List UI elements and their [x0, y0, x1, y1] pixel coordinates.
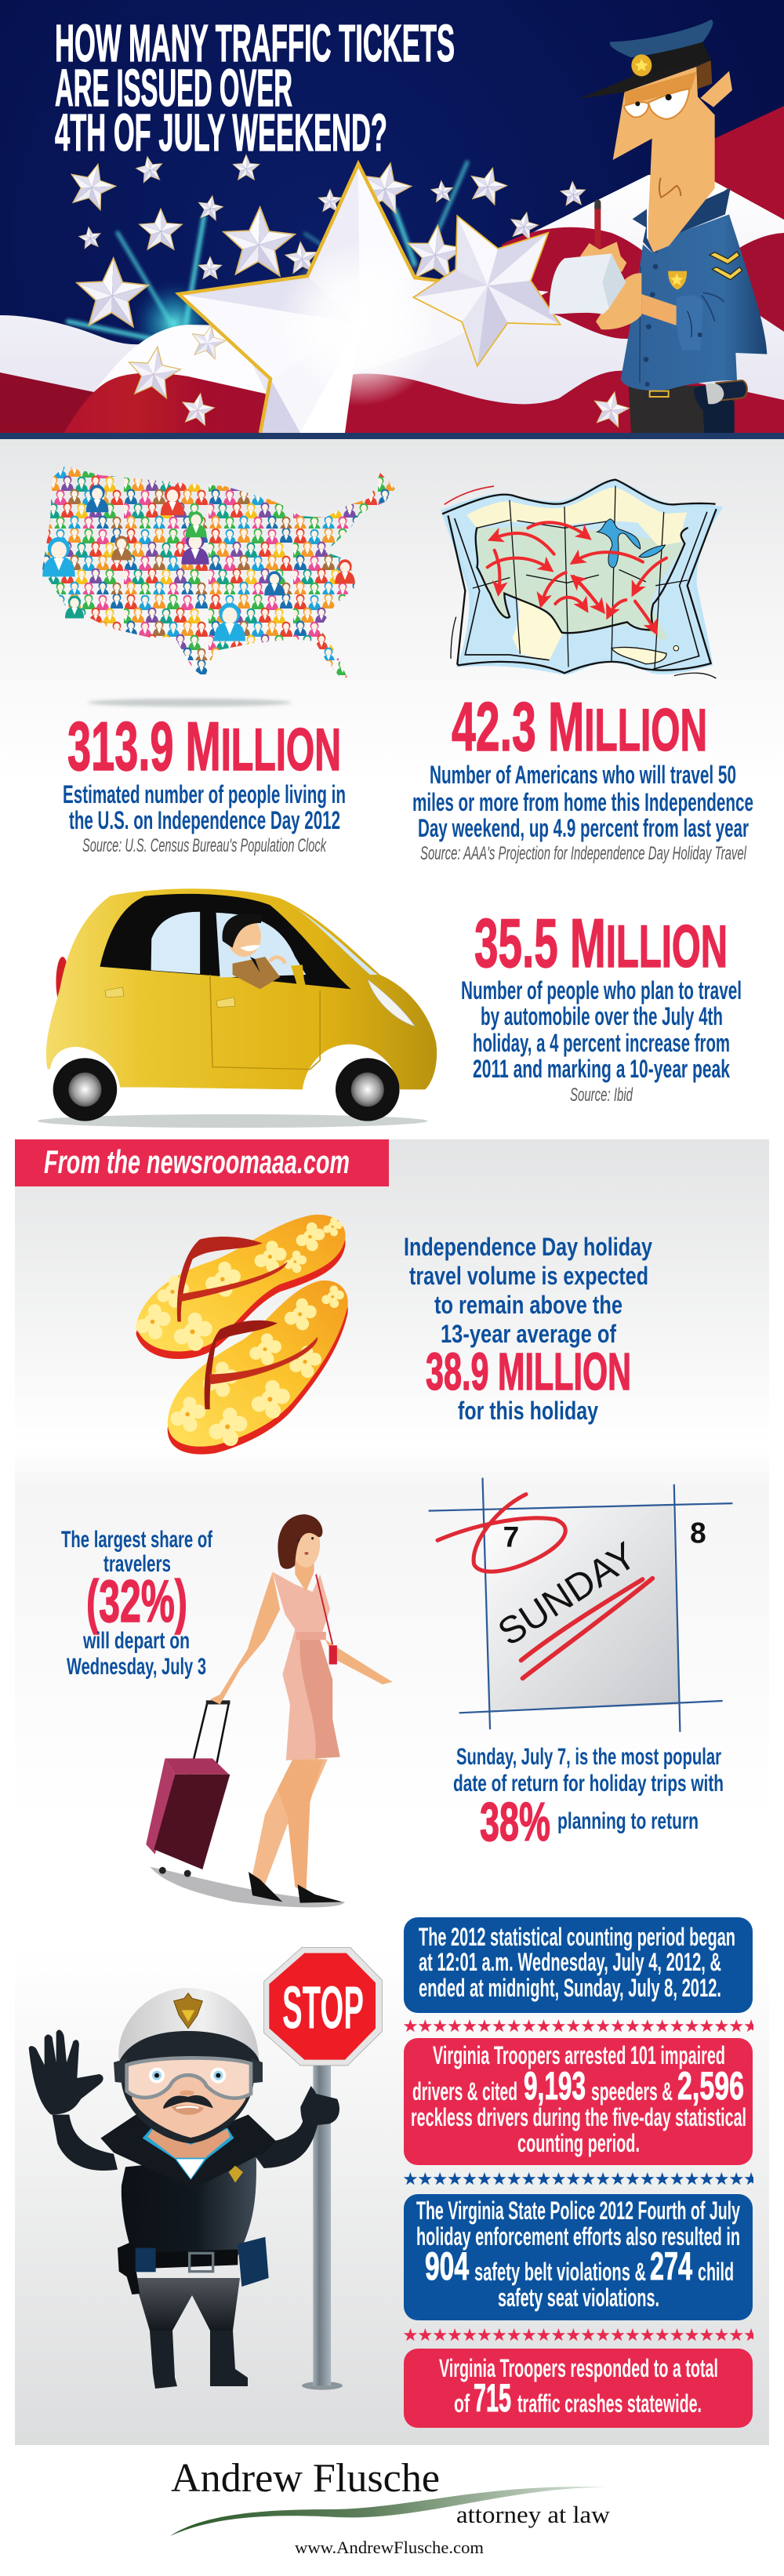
page background: upper section: [0, 439, 784, 784]
flip flop: front: [168, 1281, 348, 1455]
officer: lower body: [550, 188, 767, 433]
illustration: USA map made of people: [42, 466, 395, 678]
car wheels: [53, 1058, 400, 1121]
illustration: road map with arrows: [443, 480, 720, 678]
flip flop: back: [136, 1215, 345, 1359]
header title: 4TH OF JULY WEEKEND?: [55, 104, 387, 162]
star divider: red: [403, 2018, 753, 2033]
big gold star: [179, 164, 549, 433]
footer logo: Andrew Flusche: Andrew Flusche: [171, 2456, 440, 2501]
box: arrests and citations: speeders &: [591, 2077, 673, 2105]
text: largest share of travelers: will depart on: [82, 1628, 190, 1654]
panel: newsroom facts: [15, 1139, 769, 2445]
second gold star: [415, 217, 559, 365]
text: Sunday return: [453, 1744, 724, 1852]
text: largest share of travelers: (32%): [86, 1568, 187, 1635]
police officer: [550, 20, 767, 433]
stop sign and pole: STOP: [282, 1975, 364, 2042]
text: travel volume: to remain above the: [434, 1291, 622, 1319]
officer head and helmet: [114, 1988, 263, 2143]
flag: white waves: [0, 175, 784, 433]
flag: lower red right: [300, 371, 784, 433]
flag: upper red wave: [502, 227, 651, 339]
header title: ARE ISSUED OVER: [55, 59, 292, 118]
text: travel volume: travel volume is expected: [409, 1262, 648, 1290]
source: Source: Ibid: [570, 1085, 633, 1106]
box: arrests and citations: 2,596: [677, 2064, 744, 2108]
text: largest share of travelers: travelers: [103, 1551, 171, 1577]
small stars: [64, 154, 632, 429]
box: enforcement efforts: safety seat violations.: [498, 2284, 659, 2312]
stat description: [63, 780, 346, 834]
illustration: calendar marked Sunday: 8: [690, 1517, 706, 1549]
text: largest share of travelers: [61, 1527, 213, 1680]
box: arrests and citations: counting period.: [517, 2129, 640, 2157]
stat: 313.9 million: 313.9 MILLION: [67, 707, 341, 785]
stat description: [412, 761, 753, 842]
fireworks rays: [68, 162, 467, 369]
banner: from the newsroom: [15, 1139, 389, 1186]
stat: 35.5 million: [461, 904, 742, 1106]
stat: 42.3 million: [412, 688, 753, 864]
box: counting period: [404, 1917, 753, 2013]
box: enforcement efforts: 274: [650, 2244, 692, 2288]
illustration: flip flops: [136, 1215, 348, 1455]
stop sign and pole: [264, 1947, 382, 2390]
flag: right red stripe: [725, 233, 784, 332]
map shadow: [88, 699, 292, 707]
box: enforcement efforts: child: [698, 2258, 734, 2286]
text: largest share of travelers: The largest share of: [61, 1527, 213, 1553]
source: Source: U.S. Census Bureau's Population Clock: [82, 835, 327, 856]
header bottom band: [0, 433, 784, 439]
box: traffic crashes: of: [454, 2389, 470, 2418]
stat: 42.3 million: 42.3 MILLION: [452, 688, 707, 765]
stat description: the U.S. on Independence Day 2012: [69, 806, 340, 834]
text: travel volume: 13-year average of: [441, 1320, 616, 1348]
text: travel volume: [404, 1233, 652, 1425]
illustration: woman with suitcase: [146, 1514, 393, 1907]
box: arrests and citations: drivers & cited: [412, 2077, 517, 2105]
footer logo: Andrew Flusche: www.AndrewFlusche.com: [295, 2538, 484, 2557]
text: travel volume: 38.9 MILLION: [426, 1342, 631, 1401]
box: arrests and citations: 9,193: [524, 2064, 586, 2108]
text: Sunday return: 38%: [480, 1791, 550, 1852]
header title: [55, 14, 455, 162]
illustration: motorcycle officer with stop sign: [29, 1947, 382, 2390]
box: traffic crashes: [404, 2349, 753, 2428]
star divider: red: [403, 2327, 753, 2342]
car driver: [223, 914, 307, 994]
box: enforcement efforts: [404, 2194, 753, 2320]
flag: lower red left: [64, 373, 300, 433]
illustration: calendar marked Sunday: [429, 1478, 732, 1732]
text: largest share of travelers: Wednesday, July 3: [67, 1654, 206, 1680]
footer logo: Andrew Flusche: [170, 2456, 612, 2557]
flag: left red stripe: [0, 372, 94, 433]
illustration: calendar marked Sunday: 7: [503, 1521, 519, 1553]
flag: white ridge: [94, 325, 267, 394]
text: travel volume: for this holiday: [458, 1397, 598, 1425]
banner: from the newsroom: From the newsroomaaa.com: [44, 1143, 350, 1180]
text: Sunday return: planning to return: [557, 1808, 699, 1834]
flag: upper right red stripe: [706, 106, 784, 220]
box: traffic crashes: 715: [474, 2376, 511, 2420]
stat: 313.9 million: [63, 707, 346, 856]
stat description: [461, 976, 742, 1083]
officer belt and pouches: [118, 2237, 269, 2294]
box: arrests and citations: [404, 2038, 753, 2165]
box: enforcement efforts: 904: [425, 2244, 469, 2288]
stat description: Estimated number of people living in: [63, 780, 346, 808]
box: enforcement efforts: safety belt violations &: [474, 2258, 646, 2286]
text: travel volume: Independence Day holiday: [404, 1233, 652, 1261]
illustration: yellow car with driver: [38, 888, 437, 1128]
star divider: blue: [403, 2171, 753, 2186]
officer: head and cap: [579, 20, 732, 253]
illustration: calendar marked Sunday: SUNDAY: [491, 1534, 644, 1654]
footer logo: Andrew Flusche: attorney at law: [456, 2501, 611, 2528]
header banner: [0, 0, 784, 433]
officer body: [29, 2030, 339, 2389]
